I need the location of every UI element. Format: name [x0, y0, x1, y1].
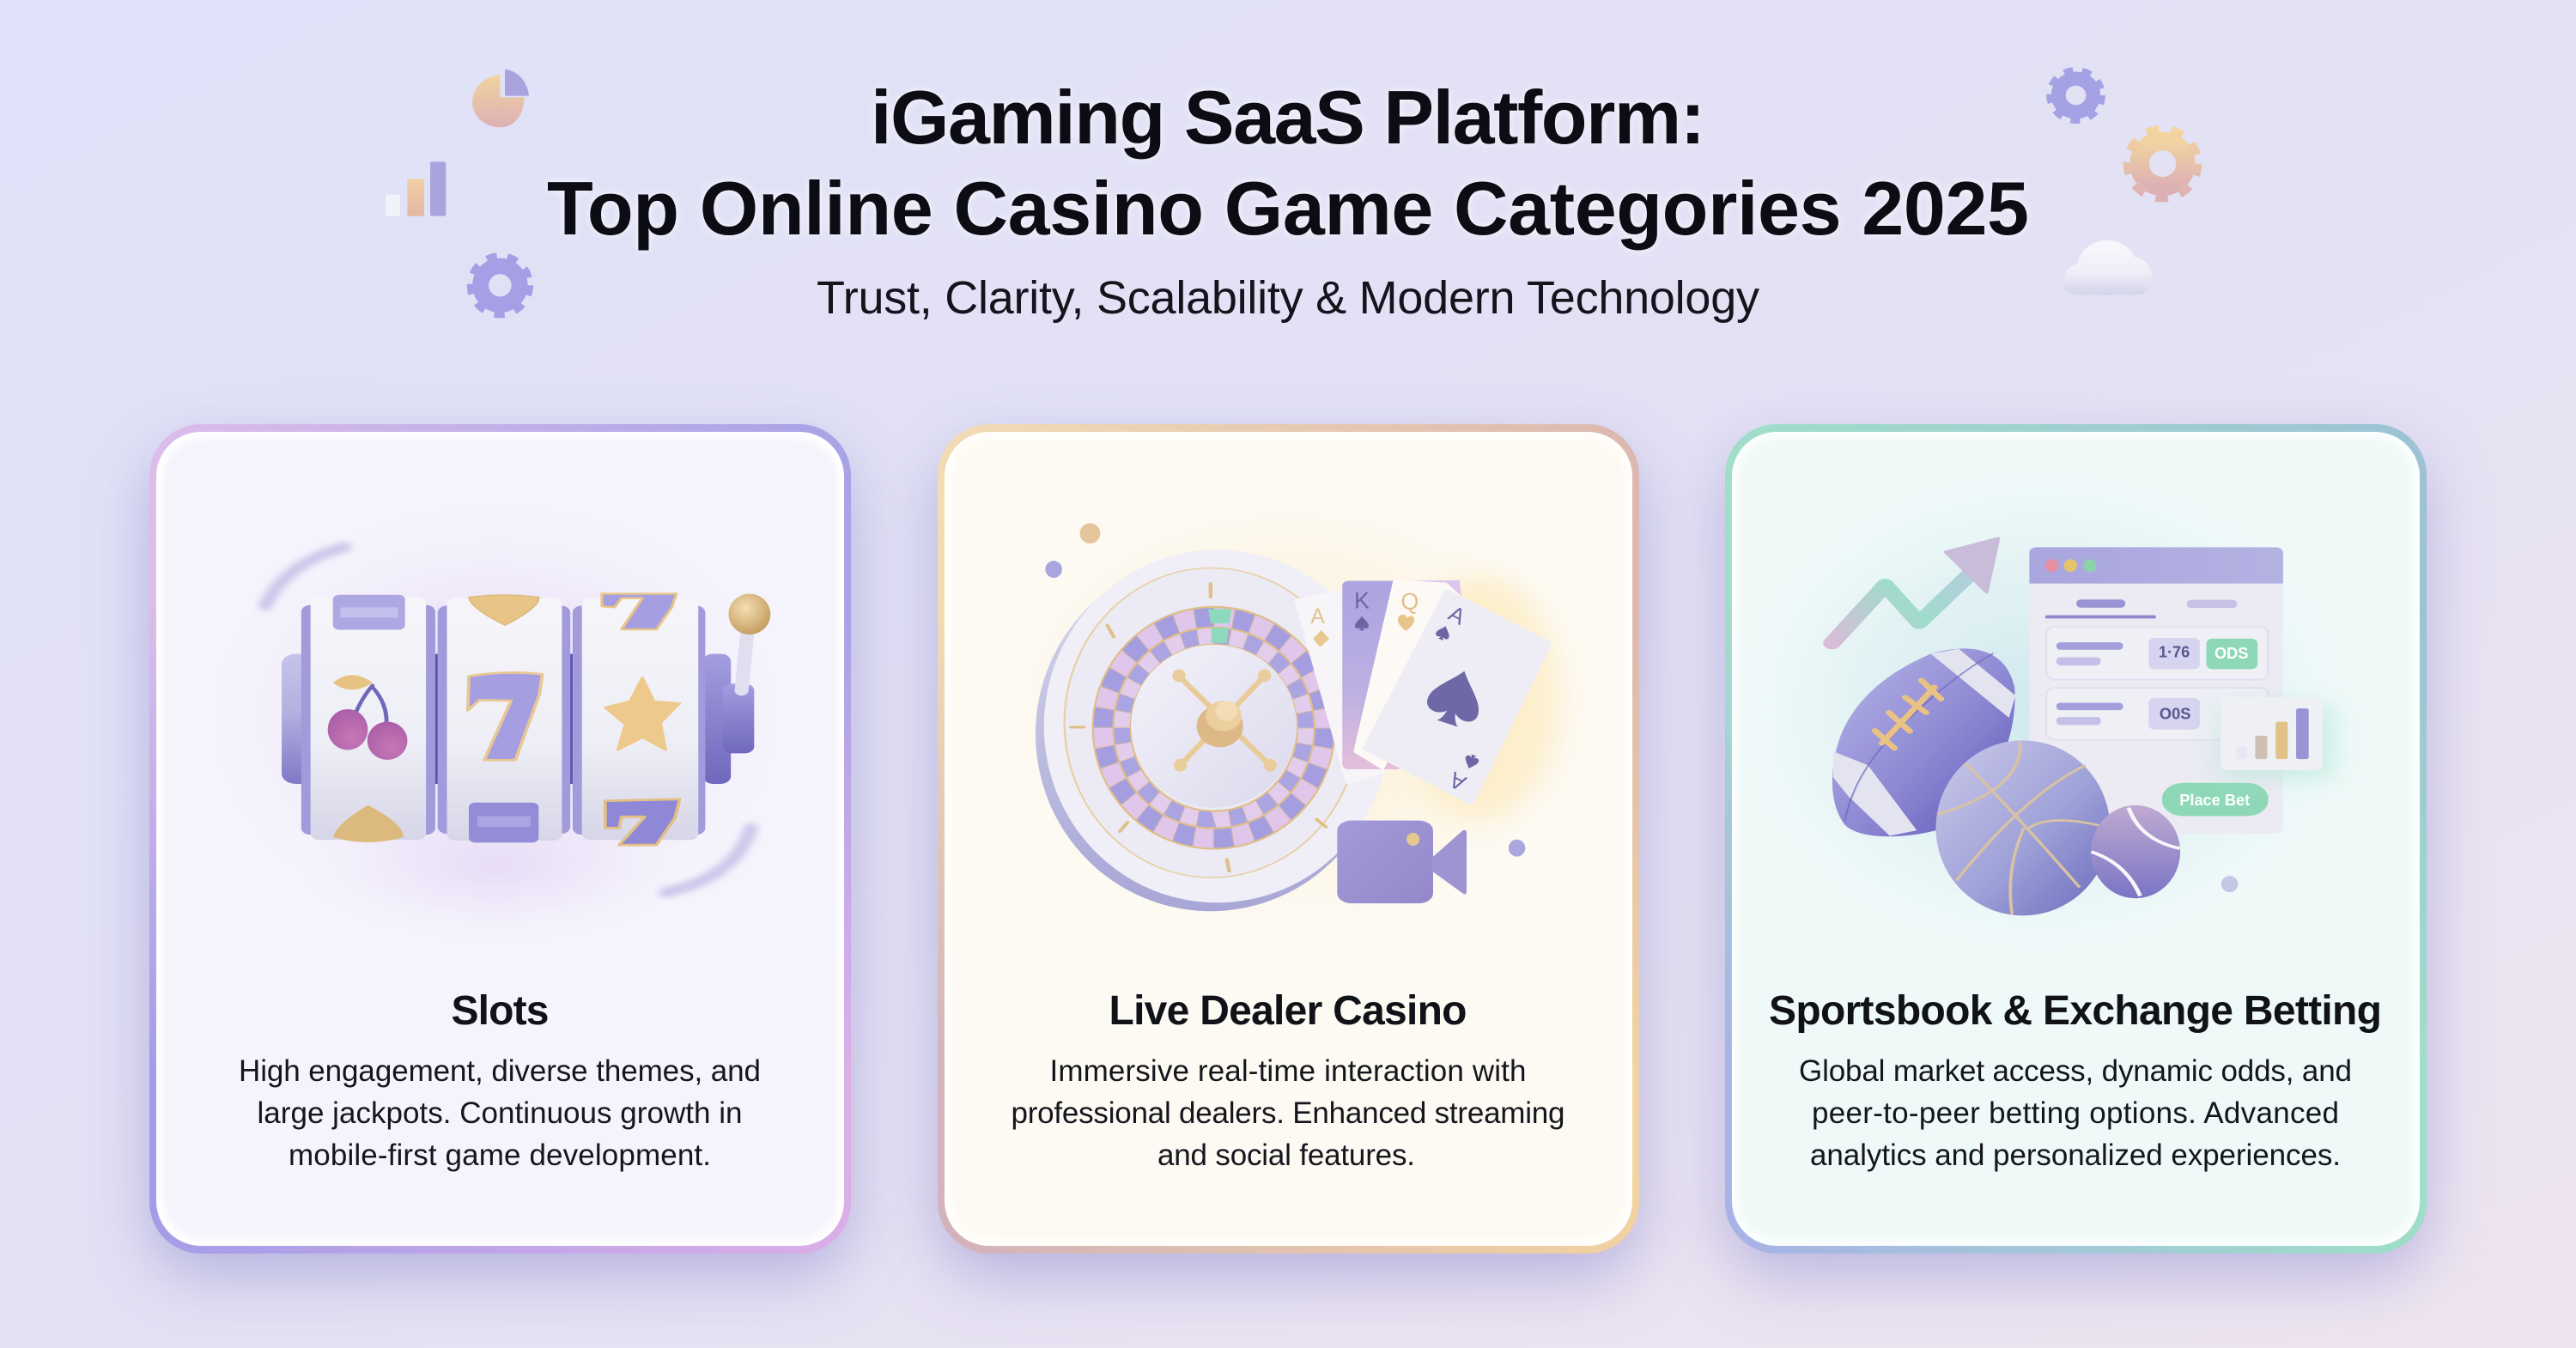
description — [239, 1054, 761, 1172]
odds row 2 — [2046, 688, 2269, 740]
tennis ball — [2091, 805, 2180, 898]
hub — [1131, 645, 1297, 808]
card ace of spades — [1366, 592, 1548, 802]
icon: pie chart — [472, 70, 529, 127]
slot machine illustration — [189, 487, 803, 949]
card glow — [1401, 575, 1559, 819]
description: mobile-first game development. — [289, 1139, 711, 1172]
description — [1012, 1054, 1564, 1172]
card frame — [149, 424, 851, 1275]
card frame — [1725, 424, 2427, 1275]
description: peer-to-peer betting options. Advanced — [1812, 1096, 2339, 1130]
panel: live dealer casino — [938, 424, 1639, 1275]
trend arrow — [1832, 538, 1998, 643]
odds row 1: 1·76 — [2159, 643, 2190, 660]
subtitle: Trust, Clarity, Scalability & Modern Technology — [817, 272, 1759, 324]
bar symbol bottom — [469, 803, 538, 842]
panel: slots — [149, 424, 851, 1275]
green pocket — [1208, 609, 1231, 643]
icon: gear warm — [2128, 130, 2197, 197]
motion swooshes — [265, 547, 750, 892]
card queen of hearts: Q — [1400, 588, 1419, 614]
description: large jackpots. Continuous growth in — [258, 1096, 742, 1130]
description: Global market access, dynamic odds, and — [1799, 1054, 2352, 1088]
mini chart card — [2221, 697, 2332, 779]
icon: cloud — [2063, 240, 2152, 295]
card ace of diamonds: A — [1310, 605, 1325, 628]
tick marks — [1071, 584, 1326, 871]
left hub — [282, 654, 319, 784]
description — [1799, 1054, 2352, 1172]
basketball — [1935, 740, 2110, 915]
window dots — [2045, 559, 2097, 572]
panel: sportsbook and exchange betting — [1716, 424, 2427, 1275]
heart top — [469, 595, 539, 625]
description: and social features. — [1157, 1139, 1415, 1172]
spokes — [1179, 677, 1270, 765]
video camera icon — [1337, 821, 1467, 903]
icon: gear left — [471, 257, 529, 314]
pocket rings — [1093, 607, 1335, 849]
description: analytics and personalized experiences. — [1810, 1139, 2341, 1172]
description: Immersive real-time interaction with — [1049, 1054, 1527, 1088]
heading: Slots — [452, 988, 550, 1034]
card frame — [938, 424, 1639, 1275]
sports betting illustration — [1716, 452, 2368, 968]
card ace of spades: A — [1444, 767, 1470, 797]
bar symbol top — [333, 595, 405, 629]
floating dot — [2221, 876, 2238, 892]
card king of spades: K — [1354, 588, 1370, 614]
tabs — [2045, 599, 2237, 618]
heading: Live Dealer Casino — [1109, 988, 1467, 1034]
seven top — [602, 594, 677, 629]
description: professional dealers. Enhanced streaming — [1012, 1096, 1564, 1130]
card ace of spades: A — [1444, 600, 1470, 630]
decorative dots — [1045, 523, 1525, 857]
heading: Sportsbook & Exchange Betting — [1769, 988, 2382, 1034]
title bar — [2029, 547, 2283, 584]
place bet button — [2162, 783, 2269, 817]
star — [605, 677, 680, 750]
roulette and cards illustration — [955, 459, 1625, 962]
title: iGaming SaaS Platform: — [871, 75, 1705, 160]
betting window — [2029, 547, 2283, 834]
playing cards — [1297, 580, 1548, 802]
description: High engagement, diverse themes, and — [239, 1054, 761, 1088]
odds row 2: O0S — [2160, 705, 2190, 722]
lucky seven — [468, 672, 543, 760]
icon: bar chart — [386, 161, 446, 216]
card ace of diamonds — [1297, 592, 1382, 782]
title — [547, 75, 2029, 251]
place bet button: Place Bet — [2179, 792, 2250, 809]
header decorative icons — [386, 70, 2197, 314]
lever — [703, 594, 770, 784]
cherries — [328, 675, 407, 760]
heart bottom — [333, 805, 404, 842]
center knob — [1197, 701, 1243, 747]
card queen of hearts — [1355, 580, 1467, 768]
icon: gear top right — [2050, 70, 2102, 120]
odds row 1 — [2046, 627, 2269, 680]
football — [1832, 648, 2015, 836]
odds row 1: ODS — [2215, 645, 2248, 662]
seven bottom — [605, 799, 680, 845]
title: Top Online Casino Game Categories 2025 — [547, 166, 2029, 251]
roulette wheel — [1036, 550, 1390, 911]
card king of spades — [1342, 581, 1403, 769]
reels — [301, 597, 705, 841]
